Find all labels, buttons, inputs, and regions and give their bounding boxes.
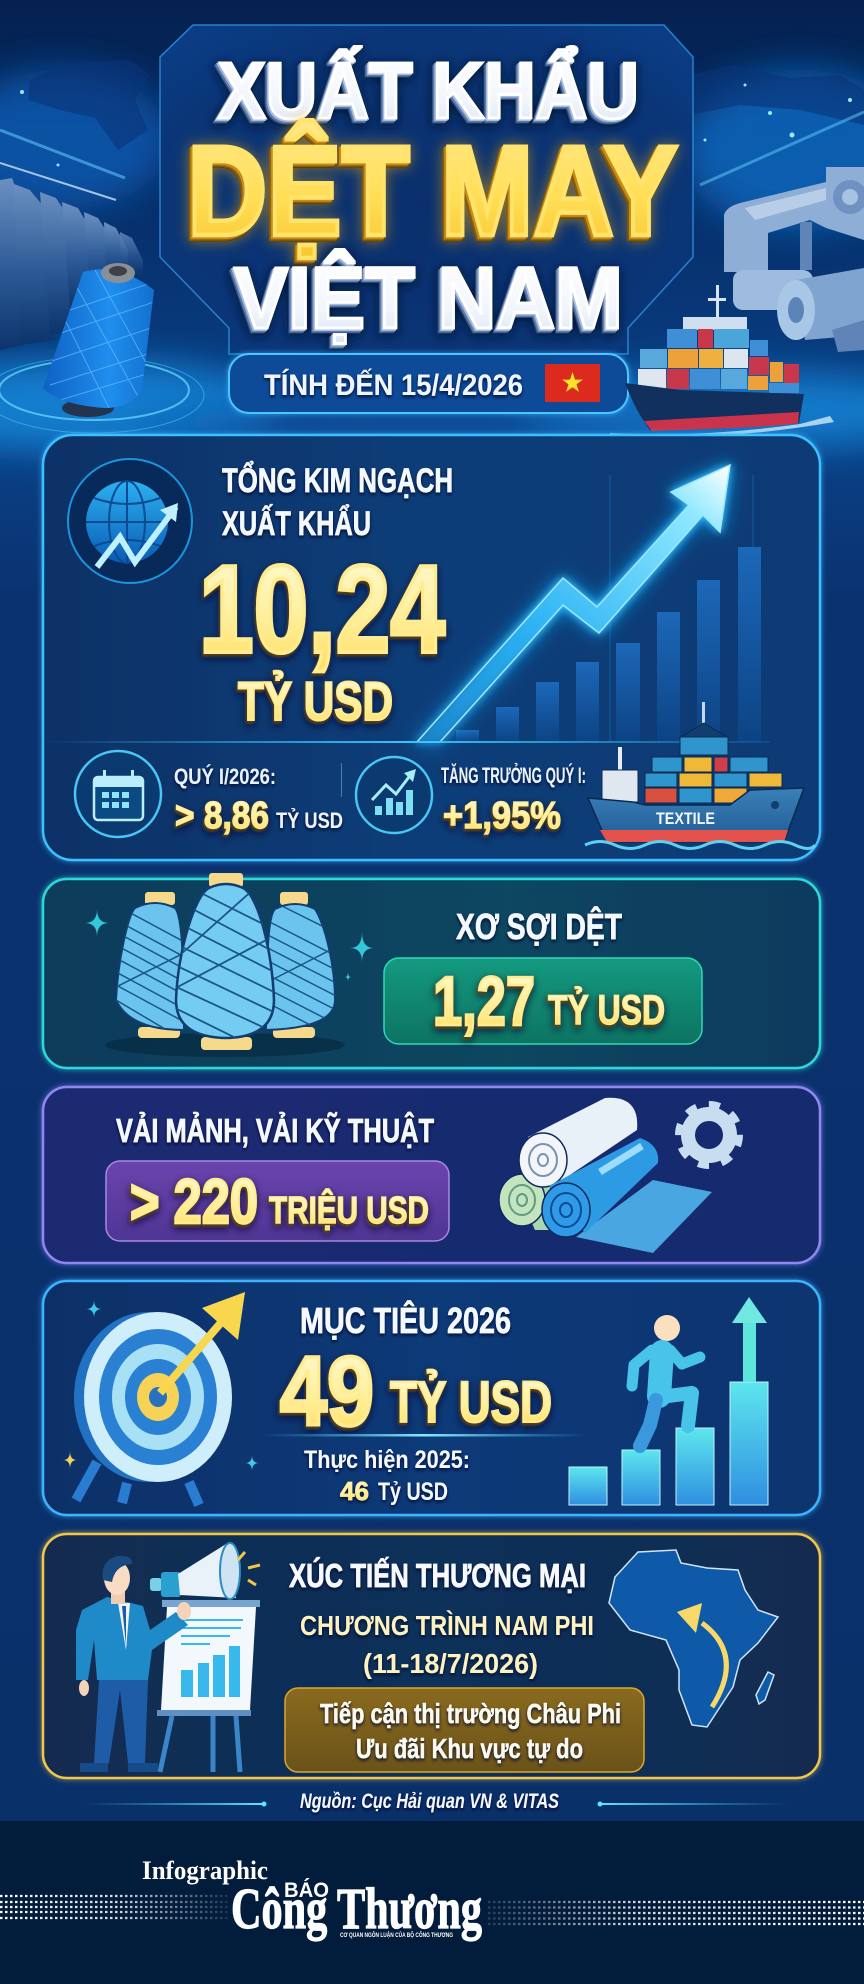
programme title — [300, 1610, 594, 1679]
big number: 10,24 — [199, 541, 445, 679]
note: 2025 actual: 46 — [340, 1476, 369, 1506]
value box: fabric — [106, 1161, 449, 1241]
stat: growth — [356, 757, 586, 837]
header scene: background — [0, 60, 864, 450]
panel: fabric — [43, 1087, 820, 1263]
title — [187, 46, 678, 347]
icon: growth chart — [356, 757, 432, 833]
value box: yarn — [384, 958, 702, 1044]
chart board — [157, 1600, 260, 1772]
icon: Vietnam flag — [545, 364, 600, 402]
heading: total export: XUẤT KHẨU — [222, 505, 371, 543]
megaphone — [150, 1543, 260, 1599]
date pill — [229, 354, 628, 413]
panel: yarn fibre — [43, 873, 820, 1068]
programme title: CHƯƠNG TRÌNH NAM PHI — [300, 1610, 594, 1641]
dotted lines left — [0, 1896, 230, 1918]
source line — [83, 1790, 788, 1813]
icon: textile ship — [585, 702, 815, 848]
stat: first quarter: QUÝ I/2026: — [174, 764, 276, 789]
heading: trade promotion: XÚC TIẾN THƯƠNG MẠI — [289, 1557, 586, 1594]
callout: Africa market — [285, 1688, 644, 1772]
target value: TỶ USD — [390, 1370, 552, 1435]
value box: yarn: TỶ USD — [548, 985, 665, 1033]
icon: globe with arrow — [68, 459, 192, 583]
value box: yarn: 1,27 — [433, 962, 535, 1040]
icon: clothes rack — [0, 130, 143, 350]
icon: calendar — [75, 751, 161, 837]
icon: fabric rolls — [499, 1098, 712, 1253]
callout: Africa market: Tiếp cận thị trường Châu Phi — [320, 1698, 621, 1729]
person — [76, 1556, 191, 1772]
icon: yarn spools — [85, 873, 374, 1057]
logo text: Công Thương — [231, 1876, 482, 1941]
icon: blue yarn spool — [0, 263, 204, 433]
icon: sparkles — [85, 909, 374, 982]
icon: sewing machine and fabric rolls — [700, 112, 864, 352]
icon: world map silhouettes — [28, 60, 864, 150]
logo text — [142, 1856, 482, 1941]
icon: climbing steps — [569, 1297, 768, 1505]
title line: DỆT MAY: DỆT MAY — [187, 120, 678, 263]
date text: TÍNH ĐẾN 15/4/2026 — [264, 368, 523, 402]
value box: fabric: TRIỆU USD — [269, 1188, 429, 1232]
heading: fabric: VẢI MẢNH, VẢI KỸ THUẬT — [116, 1112, 434, 1149]
target value: 49 — [280, 1336, 374, 1446]
ship label: TEXTILE — [656, 809, 715, 828]
heading: target: MỤC TIÊU 2026 — [300, 1299, 511, 1341]
header frame — [160, 25, 693, 354]
arrow: growth — [417, 465, 730, 742]
logo text: CƠ QUAN NGÔN LUẬN CỦA BỘ CÔNG THƯƠNG — [340, 1931, 453, 1939]
logo text: Infographic — [142, 1856, 268, 1885]
title line: VIỆT NAM: VIỆT NAM — [234, 250, 623, 347]
panel: trade promotion — [43, 1534, 820, 1778]
source text: Nguồn: Cục Hải quan VN & VITAS — [300, 1790, 559, 1813]
logo text: BÁO — [284, 1879, 329, 1902]
value box: fabric: > 220 — [130, 1167, 258, 1237]
stat: growth: TĂNG TRƯỞNG QUÝ I: — [441, 763, 586, 788]
target value — [280, 1336, 552, 1446]
sparkle lights — [20, 84, 852, 166]
programme title: (11-18/7/2026) — [363, 1648, 538, 1679]
stat: first quarter: > 8,86 — [175, 795, 269, 837]
heading: total export: TỔNG KIM NGẠCH — [222, 462, 453, 500]
dotted lines right — [488, 1902, 864, 1924]
unit: TỶ USD — [238, 670, 393, 732]
icon: Africa map with arrow — [609, 1550, 778, 1727]
callout: Africa market: Ưu đãi Khu vực tự do — [356, 1733, 583, 1764]
note: 2025 actual — [304, 1446, 470, 1506]
heading: yarn: XƠ SỢI DỆT — [456, 905, 622, 947]
stat: growth: +1,95% — [443, 795, 561, 837]
icon: container ship — [610, 285, 834, 437]
note: 2025 actual: Thực hiện 2025: — [304, 1446, 470, 1474]
icon: gear — [679, 1105, 739, 1165]
icon: target with arrow — [63, 1292, 259, 1505]
heading: total export — [222, 462, 453, 543]
icon: presenter with megaphone and board — [76, 1543, 260, 1772]
footer — [0, 1821, 864, 1984]
panel: 2026 target — [43, 1281, 820, 1515]
panel: total export value — [43, 435, 820, 860]
bar chart — [456, 475, 761, 742]
stat: first quarter: TỶ USD — [276, 808, 343, 833]
stat: first quarter — [75, 751, 343, 837]
note: 2025 actual: Tỷ USD — [378, 1478, 448, 1506]
title line: XUẤT KHẨU: XUẤT KHẨU — [218, 46, 639, 135]
